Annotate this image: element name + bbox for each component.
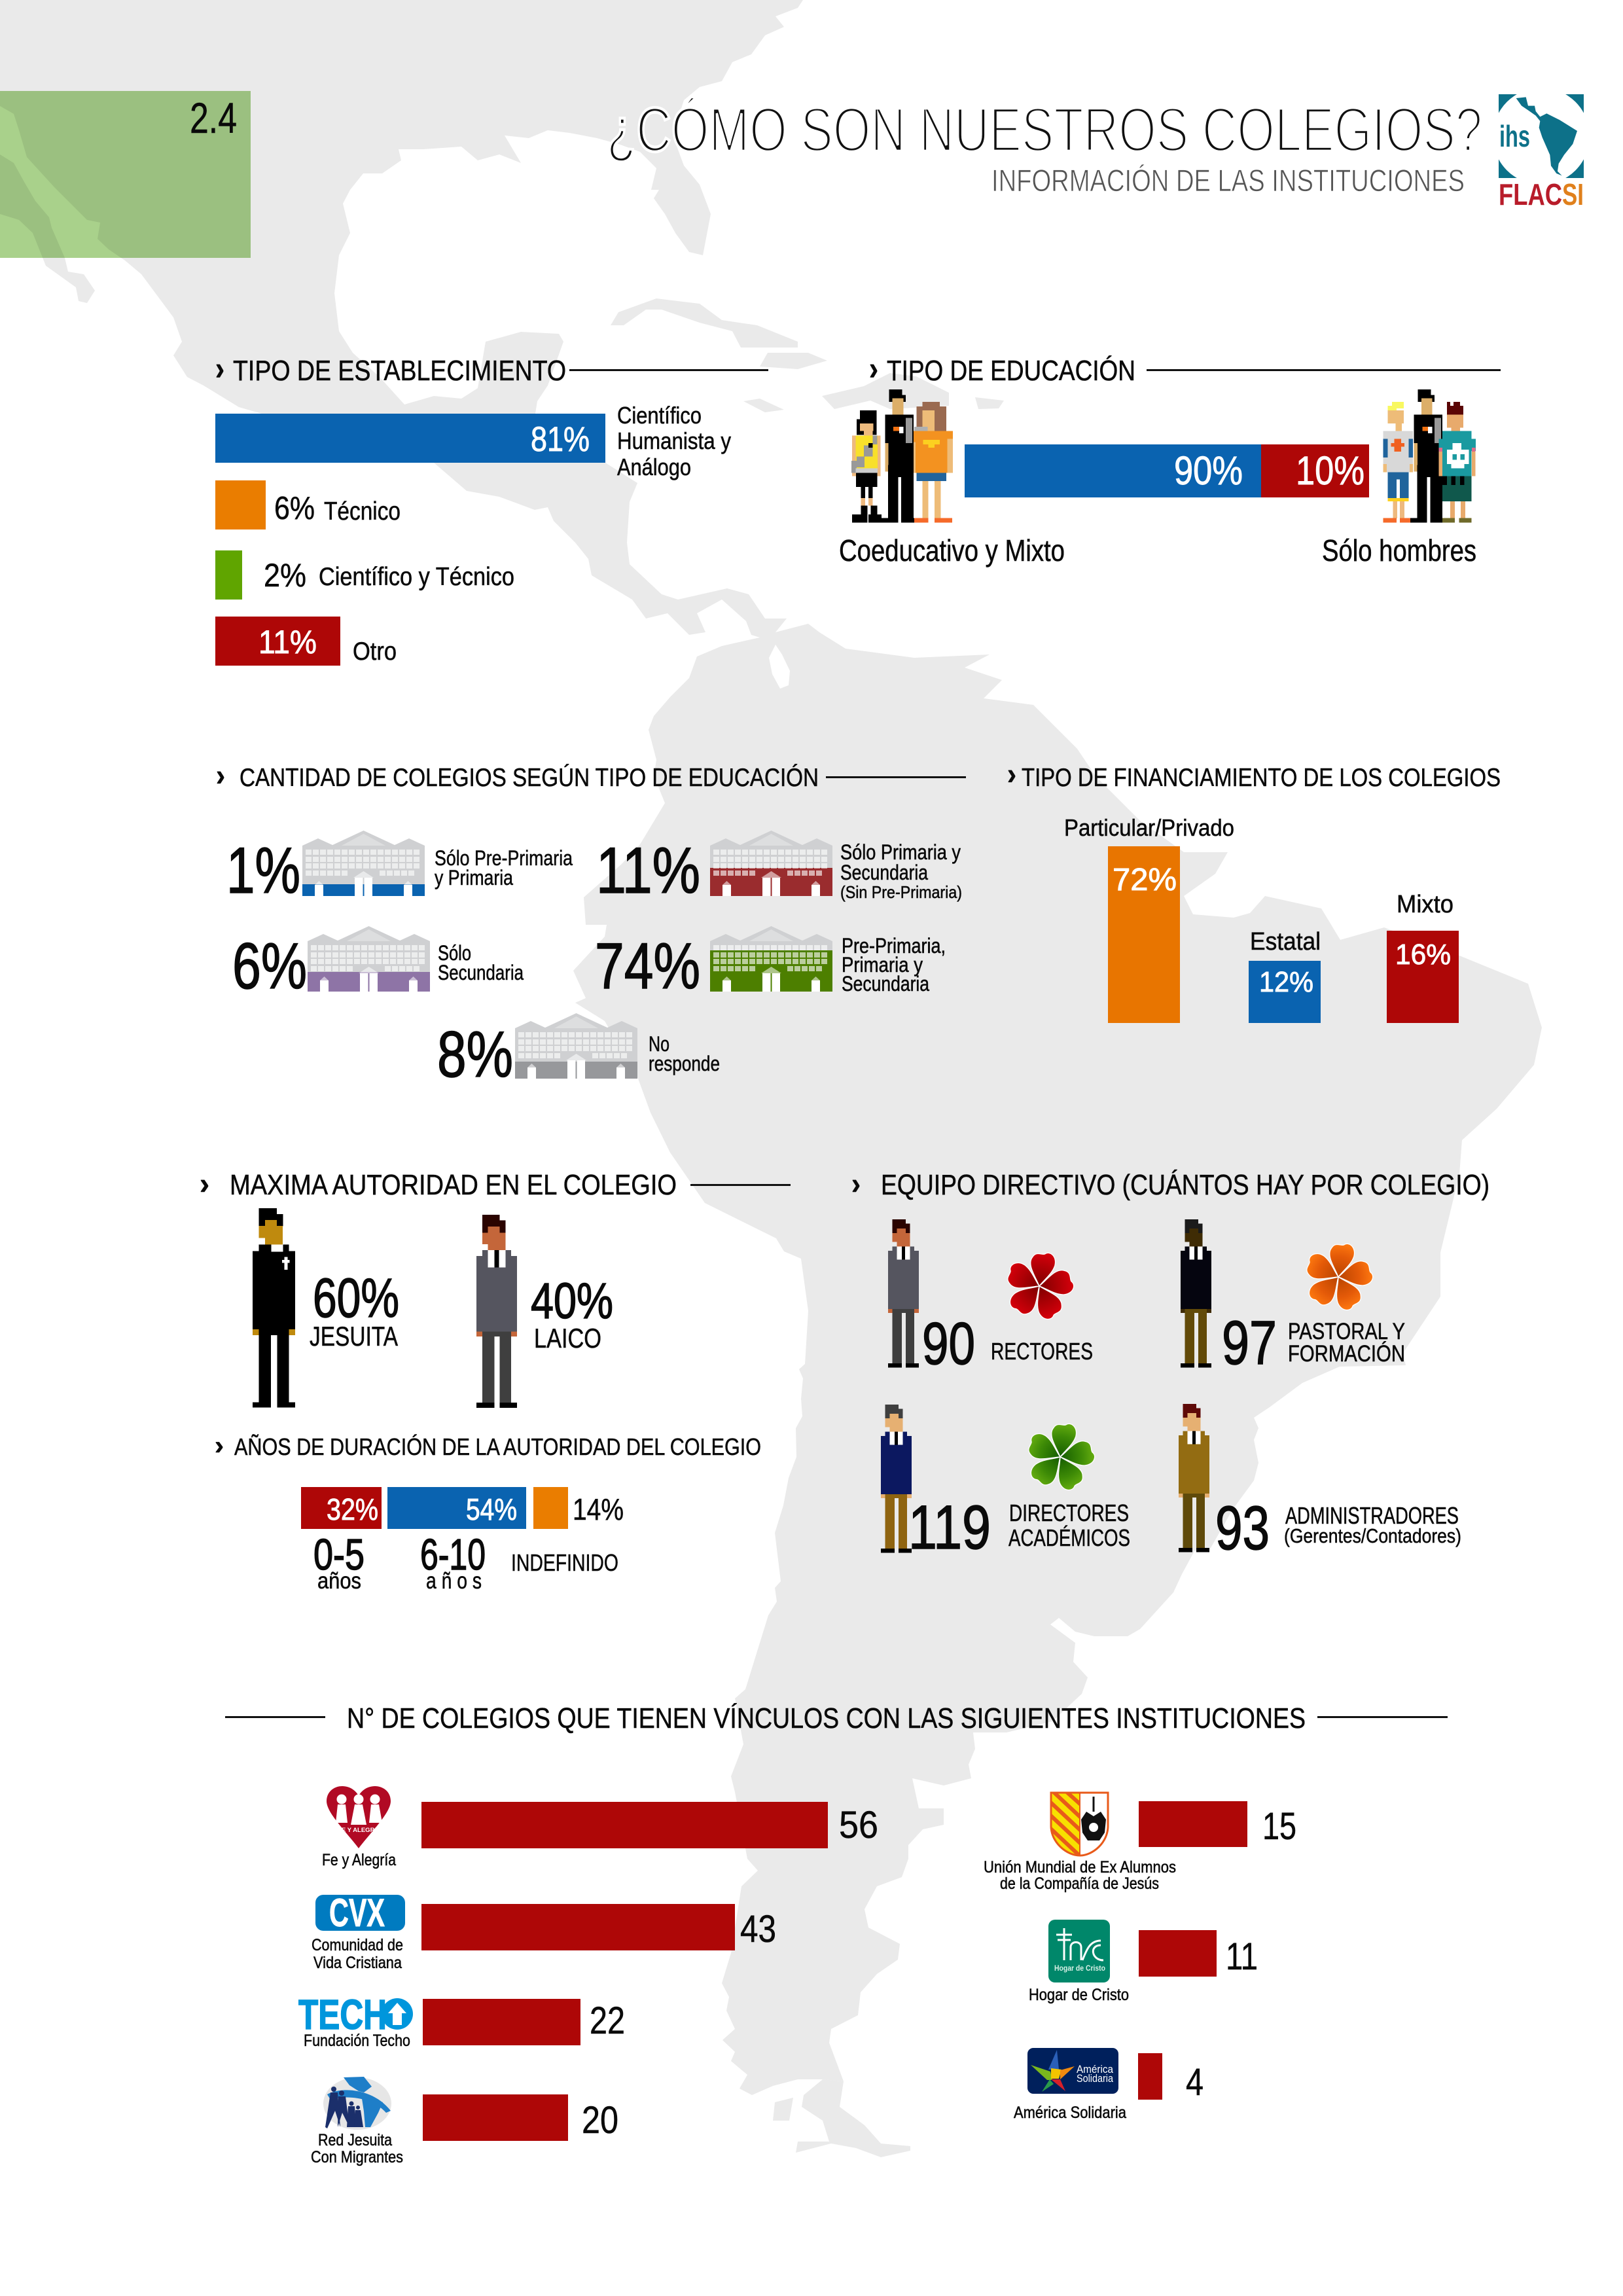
bar: 2% científico y técnico	[215, 550, 514, 600]
logo: ihs FLACSI	[1499, 94, 1584, 206]
logo: ihs FLACSI: SI	[1562, 177, 1584, 211]
bar: 0-5 años 32%: años	[317, 1568, 361, 1594]
item: Techo 22: Fundación Techo	[304, 2032, 410, 2050]
item: 119 directores académicos: ACADÉMICOS	[1008, 1524, 1130, 1551]
icon: fe y alegría heart: FE Y ALEGRIA	[338, 1827, 382, 1833]
icon: américa solidaria logo: América	[1077, 2063, 1113, 2075]
bar: estatal 12%: Estatal	[1250, 928, 1321, 956]
bar: 81% científico humanista: Humanista y	[617, 427, 731, 454]
bar: 6-10 años 54%: 54%	[466, 1492, 517, 1526]
stacked bar: 90% / 10%: 90%	[1174, 448, 1243, 493]
item: Red Jesuita con Migrantes 20: Con Migrantes	[311, 2148, 403, 2166]
icon: hogar de cristo logo	[1048, 1920, 1110, 1982]
heading: ›	[215, 1431, 224, 1460]
icon: boys pixel group	[1383, 389, 1476, 522]
icon: shield	[1050, 1792, 1109, 1856]
bar: mixto 16%: 16%	[1395, 939, 1451, 971]
item: 74% pre-primaria, primaria y secundaria: Pre-Primaria,	[842, 934, 946, 958]
heading: TIPO DE ESTABLECIMIENTO	[233, 355, 566, 387]
bar: 81% científico humanista: 81%	[531, 420, 590, 459]
item: 8% no responde: No	[649, 1032, 669, 1056]
bar: 11% otro	[215, 617, 397, 666]
bar: 0-5 años 32%	[301, 1487, 382, 1594]
item: 93 administradores: (Gerentes/Contadores)	[1284, 1524, 1461, 1547]
heading: ›	[216, 758, 225, 792]
bar: 2% científico y técnico: Científico y Técnico	[319, 563, 514, 591]
item: 97 pastoral y formación: 97	[1222, 1308, 1277, 1378]
item: 1% sólo pre-primaria y primaria: y Primaria	[435, 866, 513, 889]
stat: 60% jesuita: 60%	[313, 1267, 399, 1329]
item: CVX 43: 43	[740, 1908, 776, 1950]
heading: ›	[851, 1166, 861, 1200]
panel: cantidad de colegios según tipo de educación	[216, 758, 966, 1090]
heading: ›	[869, 350, 878, 387]
panel: tipo de educación	[839, 350, 1501, 567]
label: coeducativo y mixto: Coeducativo y Mixto	[839, 533, 1065, 567]
item: Techo 22: 22	[590, 2000, 625, 2042]
item: 119 directores académicos: DIRECTORES	[1009, 1499, 1129, 1526]
green chapter tab	[0, 91, 251, 258]
icon: hogar de cristo logo: Hogar de Cristo	[1054, 1964, 1105, 1973]
item: América Solidaria 4	[1014, 2048, 1204, 2122]
item: 74% pre-primaria, primaria y secundaria	[597, 926, 944, 992]
heading: TIPO DE FINANCIAMIENTO DE LOS COLEGIOS	[1022, 764, 1501, 792]
stat: 40% laico: 40%	[531, 1273, 613, 1329]
item: 6% sólo secundaria: Sólo	[438, 941, 471, 965]
item: 97 pastoral y formación: FORMACIÓN	[1288, 1341, 1405, 1367]
bar: estatal 12%: 12%	[1259, 966, 1313, 998]
item: 97 pastoral y formación: PASTORAL Y	[1288, 1319, 1405, 1344]
item: Unión Mundial de Ex Alumnos 15: de la Compañía de Jesús	[1000, 1874, 1159, 1893]
bar: particular/privado 72%: 72%	[1113, 863, 1177, 897]
heading: ›	[215, 350, 224, 387]
icon: lay figure	[476, 1215, 517, 1408]
bar: 6% técnico	[215, 480, 401, 529]
item: Red Jesuita con Migrantes 20: Red Jesuita	[318, 2131, 392, 2149]
panel: años de duración	[215, 1431, 761, 1594]
bar: indefinido 14%: INDEFINIDO	[511, 1549, 618, 1576]
item: Hogar de Cristo 11: 11	[1226, 1935, 1258, 1978]
heading	[215, 350, 768, 387]
item: 6% sólo secundaria: 6%	[232, 929, 307, 1002]
bar: 6-10 años 54%	[387, 1487, 526, 1594]
heading: ›	[1007, 757, 1016, 791]
label: sólo hombres: Sólo hombres	[1322, 533, 1476, 567]
icon: cvx logo: CVX	[329, 1891, 385, 1935]
item: 93 administradores: ADMINISTRADORES	[1285, 1502, 1459, 1529]
item: América Solidaria 4: 4	[1186, 2061, 1204, 2104]
item: Unión Mundial de Ex Alumnos 15: Unión Mundial de Ex Alumnos	[984, 1858, 1176, 1876]
bar: 6% técnico: Técnico	[324, 497, 401, 526]
item: 6% sólo secundaria	[234, 926, 524, 992]
icon: américa solidaria logo: Solidaria	[1077, 2072, 1113, 2085]
item: Red Jesuita con Migrantes 20: 20	[582, 2099, 618, 2142]
heading: N° DE COLEGIOS QUE TIENEN VÍNCULOS CON LAS SIGUIENTES INSTITUCIONES	[347, 1702, 1306, 1734]
bar: indefinido 14%: 14%	[573, 1492, 624, 1526]
item: 11% sólo primaria y secundaria: (Sin Pre-Primaria)	[840, 882, 962, 902]
item: 11% sólo primaria y secundaria: 11%	[596, 834, 700, 906]
stat: 40% laico	[531, 1273, 613, 1354]
stacked bar: 90% / 10%	[965, 444, 1369, 497]
logo: ihs FLACSI: FLAC	[1499, 177, 1562, 211]
icon: techo logo: TECH	[298, 1991, 387, 2038]
stat: 60% jesuita: JESUITA	[310, 1321, 398, 1352]
item: Unión Mundial de Ex Alumnos 15: 15	[1262, 1805, 1296, 1848]
item: América Solidaria 4: América Solidaria	[1014, 2104, 1126, 2122]
bar: 0-5 años 32%: 0-5	[313, 1530, 365, 1579]
bar: 2% científico y técnico: 2%	[264, 557, 306, 594]
panel: tipo de establecimiento	[215, 350, 768, 666]
item: Fe y Alegría 56: Fe y Alegría	[322, 1851, 396, 1869]
item: 97 pastoral y formación	[1181, 1219, 1405, 1378]
item: 8% no responde: 8%	[437, 1018, 513, 1090]
item: 119 directores académicos	[881, 1405, 1130, 1562]
item: 8% no responde	[438, 1013, 720, 1079]
heading: MAXIMA AUTORIDAD EN EL COLEGIO	[230, 1169, 677, 1201]
item: 8% no responde: responde	[649, 1052, 720, 1075]
icon: globe with migrants	[323, 2077, 391, 2130]
heading: TIPO DE EDUCACIÓN	[887, 355, 1135, 387]
bar: 6-10 años 54%: a ñ o s	[426, 1568, 482, 1594]
bar: estatal 12%	[1249, 928, 1321, 1023]
icon: jesuit figure	[253, 1208, 295, 1408]
bar: mixto 16%	[1387, 891, 1459, 1023]
chapter number: 2.4	[190, 94, 237, 142]
stacked bar: 90% / 10%: 10%	[1296, 448, 1364, 493]
bar: particular/privado 72%: Particular/Privado	[1064, 814, 1234, 841]
icon: américa solidaria logo	[1027, 2048, 1118, 2094]
item: 74% pre-primaria, primaria y secundaria: 74%	[595, 929, 700, 1002]
item: Fe y Alegría 56	[322, 1786, 878, 1869]
bar: 6% técnico: 6%	[274, 491, 315, 526]
bar: 81% científico humanista	[215, 402, 731, 480]
item: 93 administradores: 93	[1215, 1494, 1270, 1563]
item: Fe y Alegría 56: 56	[839, 1804, 878, 1846]
bar: 81% científico humanista: Análogo	[617, 454, 691, 480]
panel: tipo de financiamiento	[1007, 757, 1501, 1023]
item: 1% sólo pre-primaria y primaria: Sólo Pre-Primaria	[435, 846, 573, 870]
heading	[869, 350, 1501, 387]
heading: EQUIPO DIRECTIVO (CUÁNTOS HAY POR COLEGIO)	[881, 1169, 1489, 1201]
bar: 81% científico humanista: Científico	[617, 402, 702, 429]
item: CVX 43: Comunidad de	[312, 1936, 403, 1954]
panel: máxima autoridad	[200, 1166, 791, 1408]
heading	[1007, 757, 1501, 792]
item: 93 administradores	[1179, 1404, 1461, 1563]
heading: AÑOS DE DURACIÓN DE LA AUTORIDAD DEL COLEGIO	[234, 1433, 761, 1460]
item: CVX 43: Vida Cristiana	[313, 1954, 402, 1972]
item: Hogar de Cristo 11	[1029, 1920, 1258, 2004]
bar: 11% otro: Otro	[353, 637, 397, 666]
panel: equipo directivo	[851, 1166, 1489, 1563]
item: Unión Mundial de Ex Alumnos 15	[984, 1792, 1296, 1893]
bar: 0-5 años 32%: 32%	[327, 1492, 378, 1526]
bar: indefinido 14%	[511, 1487, 624, 1576]
item: 90 rectores: 90	[922, 1311, 975, 1377]
stat: 60% jesuita	[310, 1267, 399, 1352]
item: Red Jesuita con Migrantes 20	[311, 2077, 618, 2166]
bar: 6-10 años 54%: 6-10	[420, 1530, 486, 1579]
item: Techo 22	[298, 1991, 625, 2050]
heading: ›	[200, 1166, 209, 1200]
stat: 40% laico: LAICO	[534, 1323, 601, 1354]
item: 74% pre-primaria, primaria y secundaria: Secundaria	[842, 972, 929, 996]
item: 1% sólo pre-primaria y primaria: 1%	[226, 834, 300, 906]
bar: 11% otro: 11%	[259, 624, 317, 660]
item: 90 rectores: RECTORES	[991, 1338, 1093, 1365]
bar: particular/privado 72%	[1064, 814, 1234, 1023]
item: 11% sólo primaria y secundaria: Sólo Primaria y	[840, 840, 961, 864]
item: 74% pre-primaria, primaria y secundaria: Primaria y	[842, 953, 923, 977]
heading: CANTIDAD DE COLEGIOS SEGÚN TIPO DE EDUCACIÓN	[240, 764, 819, 792]
item: 90 rectores	[888, 1219, 1093, 1377]
icon: coeducational pixel group	[851, 389, 953, 522]
panel: vínculos con instituciones	[225, 1702, 1448, 2166]
logo: ihs FLACSI: ihs	[1499, 119, 1530, 153]
bar: mixto 16%: Mixto	[1397, 891, 1454, 918]
item: 1% sólo pre-primaria y primaria	[230, 831, 573, 896]
item: Hogar de Cristo 11: Hogar de Cristo	[1029, 1986, 1129, 2004]
icon: fe y alegría heart	[327, 1786, 391, 1848]
item: CVX 43	[312, 1891, 776, 1972]
item: 6% sólo secundaria: Secundaria	[438, 961, 524, 984]
item: 119 directores académicos: 119	[908, 1493, 991, 1562]
subtitle: INFORMACIÓN DE LAS INSTITUCIONES	[991, 163, 1465, 198]
item: 11% sólo primaria y secundaria: Secundaria	[840, 861, 928, 884]
item: 11% sólo primaria y secundaria	[596, 831, 962, 906]
